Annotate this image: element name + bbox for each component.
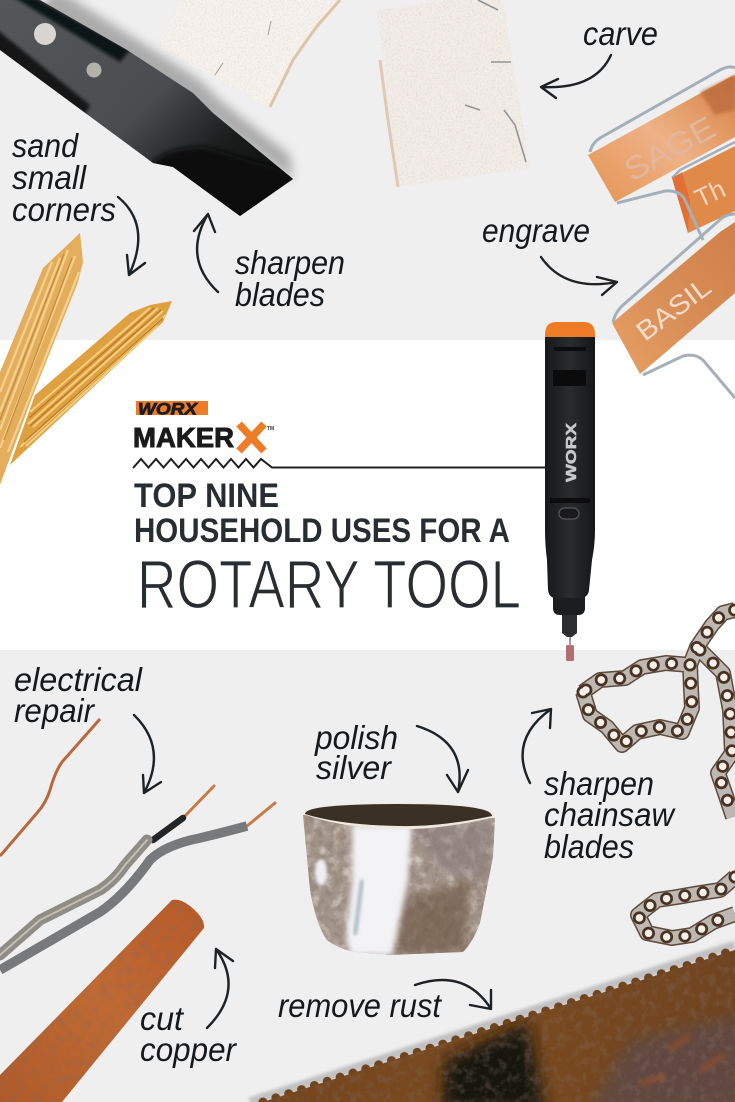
label: engrave: engrave — [482, 212, 590, 249]
arrow: sand small corners — [118, 197, 145, 275]
label: electrical repair: repair — [14, 692, 96, 729]
label: sand small corners: sand — [12, 127, 80, 164]
image: rusty saw — [250, 945, 735, 1102]
logo: MAKERX: TM — [267, 426, 274, 432]
image: chainsaw chain upper — [583, 610, 735, 817]
tag: basil — [612, 214, 735, 398]
image: bare copper wire — [0, 719, 100, 856]
label: sharpen blades: sharpen — [235, 244, 345, 281]
heading: household uses for a: HOUSEHOLD USES FOR A — [134, 512, 510, 550]
stick: right — [10, 301, 172, 465]
label: sharpen chainsaw blades: sharpen — [544, 765, 654, 802]
arrow: sharpen chainsaw blades — [523, 709, 551, 783]
arrow: electrical repair — [134, 715, 161, 793]
arrow: cut copper — [207, 949, 233, 1028]
label: sharpen chainsaw blades — [544, 765, 676, 865]
label: polish silver — [314, 719, 398, 786]
arrow: polish silver — [417, 726, 468, 792]
heading: rotary tool: ROTARY TOOL — [137, 546, 521, 623]
image: stone piece left — [150, 0, 345, 110]
label: electrical repair: electrical — [14, 661, 144, 698]
label: cut copper: cut — [140, 1000, 185, 1037]
label: sand small corners: corners — [12, 191, 116, 228]
label: sharpen blades: blades — [235, 276, 325, 313]
label: carve: carve — [583, 15, 658, 52]
image: electrical cable — [0, 786, 275, 970]
arrow: engrave — [541, 257, 617, 295]
logo: WORX: WORX — [138, 400, 199, 418]
tag: middle: Th — [690, 173, 730, 213]
arrow: carve — [541, 55, 611, 98]
label: sharpen chainsaw blades: chainsaw — [544, 796, 676, 833]
tag: middle — [672, 142, 735, 233]
label: cut copper — [140, 1000, 238, 1068]
tag: sage — [588, 67, 735, 240]
label: polish silver: polish — [314, 719, 398, 756]
tag: sage: SAGE — [618, 109, 721, 188]
arrow: remove rust — [415, 980, 491, 1009]
zigzag divider line — [133, 459, 545, 468]
image: mower blade — [0, 0, 300, 225]
image: rotary tool — [545, 322, 595, 661]
title — [134, 477, 521, 623]
stick: left — [0, 233, 83, 485]
tool wordmark: WORX — [563, 423, 580, 482]
label: sand small corners: small — [12, 159, 88, 196]
image: chainsaw chain lower — [638, 877, 735, 938]
image: copper rod — [0, 895, 210, 1102]
label: remove rust: remove rust — [278, 987, 443, 1024]
label: sharpen blades — [235, 244, 345, 313]
label: sand small corners — [12, 127, 116, 228]
tag: basil: BASIL — [631, 272, 716, 347]
image: wooden sticks — [0, 233, 172, 485]
arrow: sharpen blades — [194, 214, 218, 292]
logo: MAKERX: MAKER — [133, 422, 234, 453]
image: silver bowl — [300, 800, 500, 960]
label: electrical repair — [14, 661, 144, 729]
label: cut copper: copper — [140, 1031, 238, 1068]
label: polish silver: silver — [316, 749, 393, 786]
image: stone piece right — [375, 0, 535, 190]
label: sharpen chainsaw blades: blades — [544, 828, 634, 865]
image: copper plant tags — [588, 67, 735, 398]
heading: top nine: TOP NINE — [134, 477, 279, 515]
